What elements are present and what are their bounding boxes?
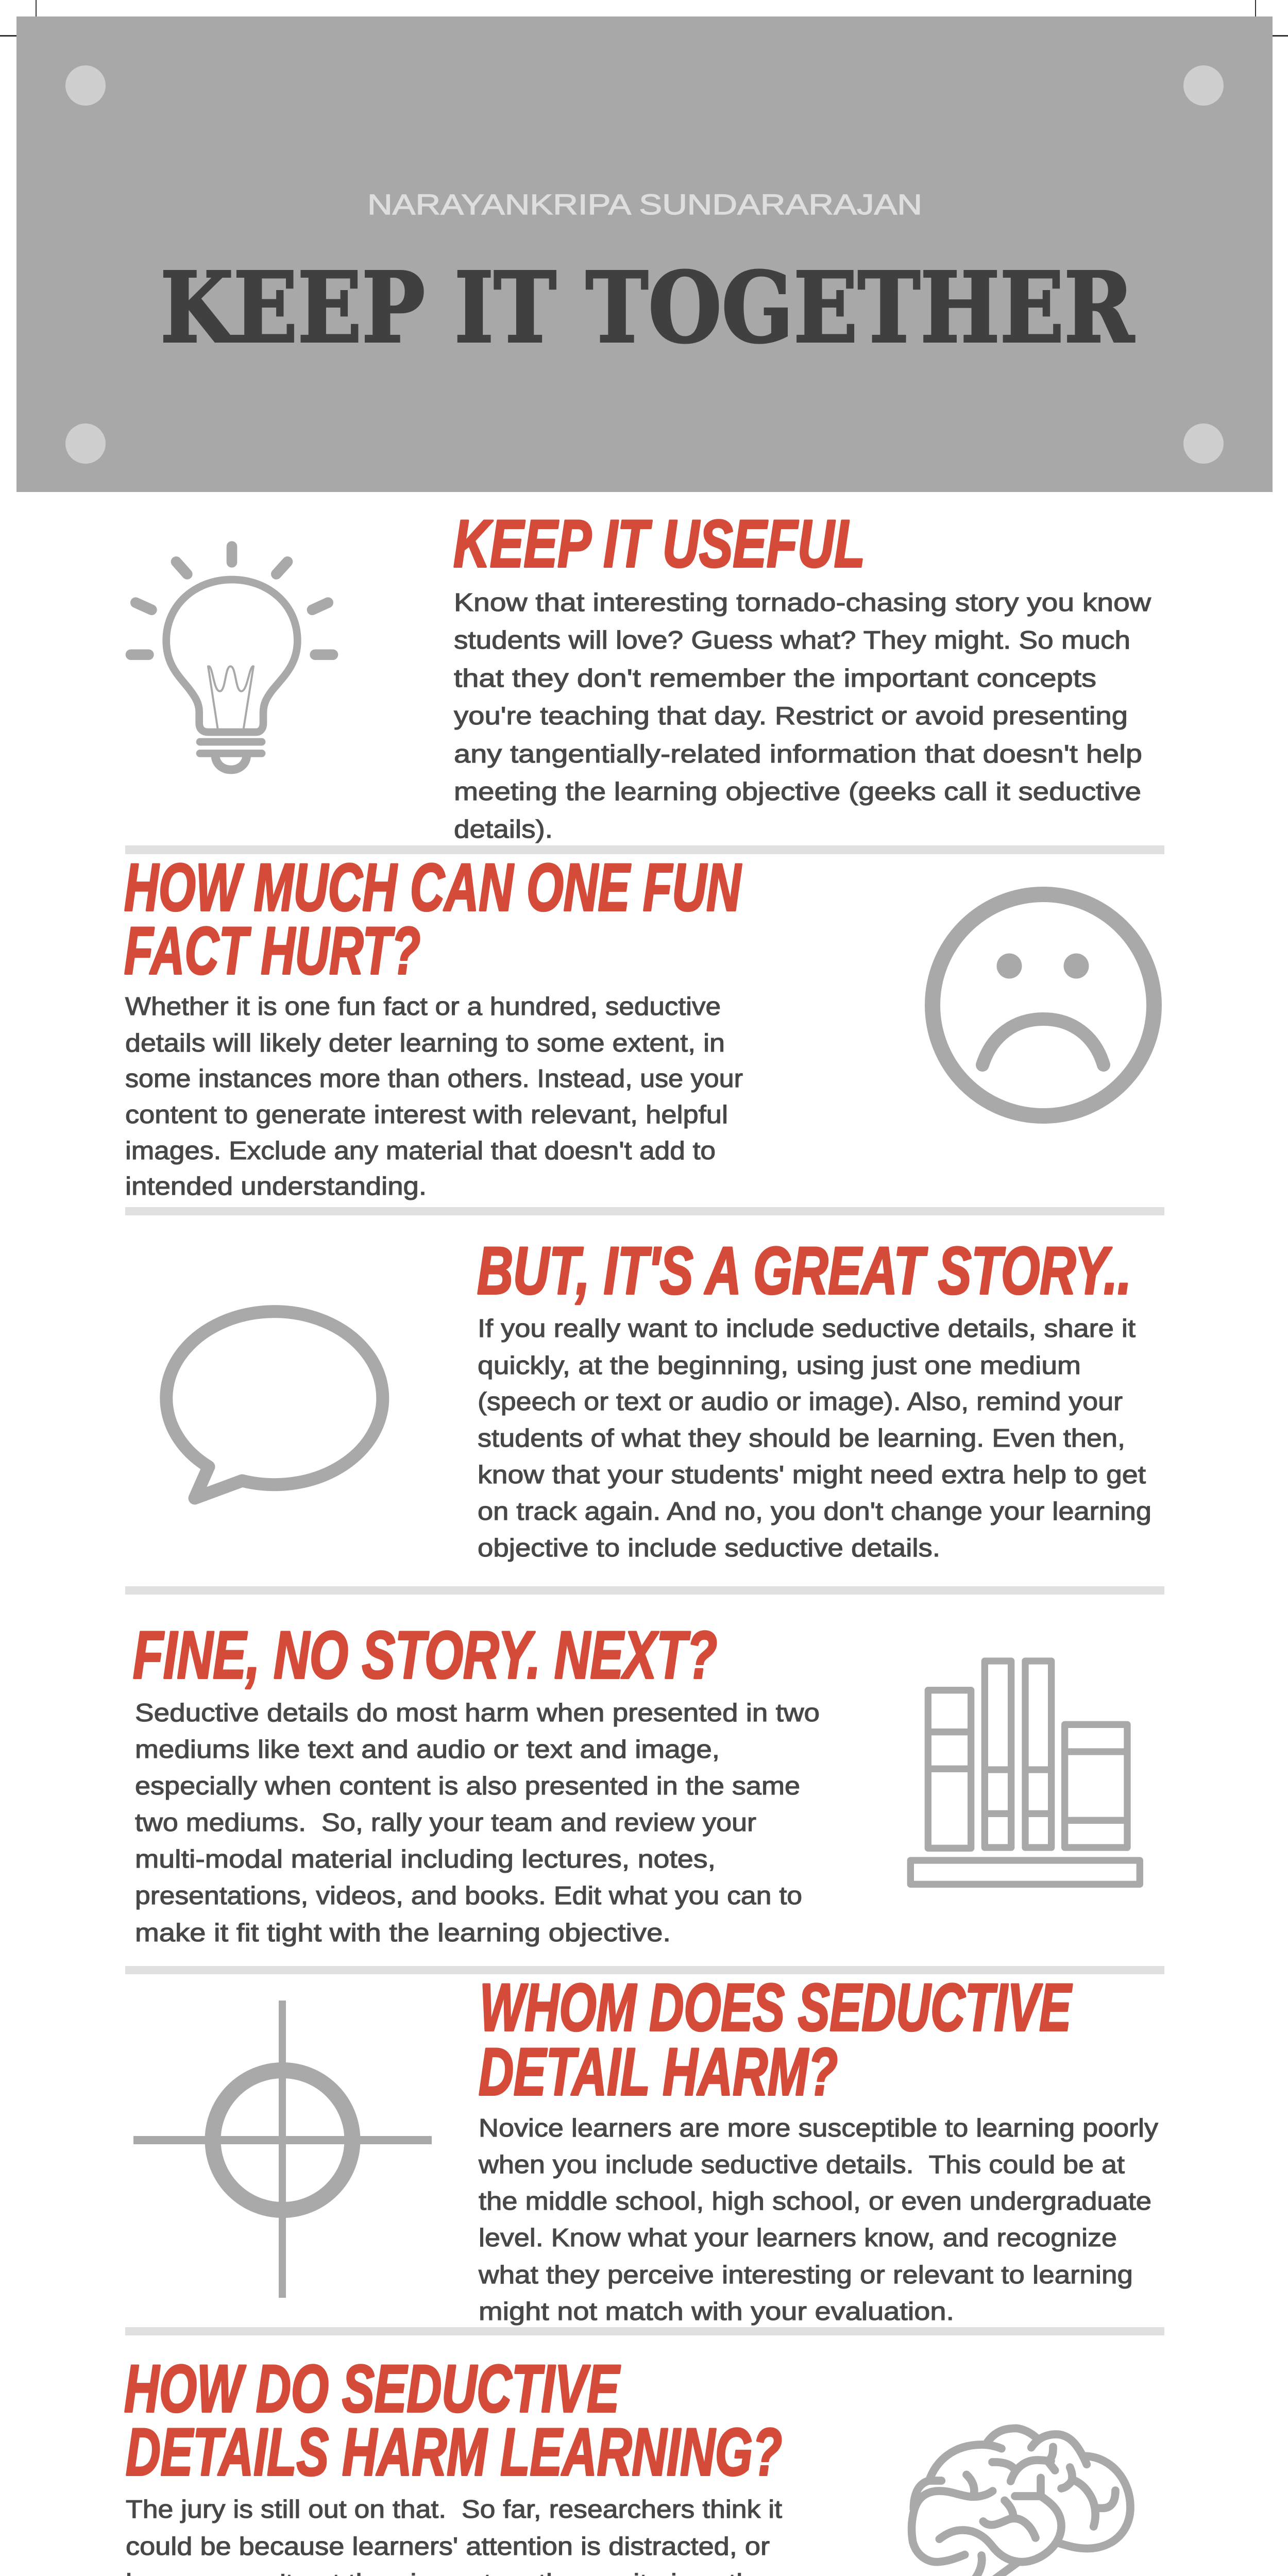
text block: fine, no story: presentations, videos, and books. Edit what you can to [135,1882,802,1910]
heading: how much can one fun fact hurt: FACT HURT? [124,913,420,988]
text block: keep it useful: any tangentially-related information that doesn't help [454,740,1142,768]
text block: keep it useful [454,589,1151,843]
text block: fine, no story: mediums like text and audio or text and image, [135,1736,720,1764]
text block: but it's a great story: know that your students' might need extra help to get [478,1461,1146,1489]
heading: whom does seductive detail harm [479,1970,1072,2109]
text block: how much can one fun fact hurt [125,993,743,1200]
text block: how much can one fun fact hurt: intended understanding. [125,1173,427,1200]
panel: keep it useful [131,506,1151,843]
text block: whom does seductive detail harm: what they perceive interesting or relevant to learning [478,2261,1133,2289]
text block: how do seductive details harm learning: The jury is still out on that. So far, researchers think it [126,2496,782,2523]
heading: how much can one fun fact hurt: HOW MUCH CAN ONE FUN [124,850,742,925]
text block: fine, no story: make it fit tight with the learning objective. [135,1919,671,1947]
text block: keep it useful: meeting the learning objective (geeks call it seductive [454,778,1141,806]
text block: but it's a great story: quickly, at the beginning, using just one medium [478,1352,1081,1380]
panel: fine, no story [133,1617,1140,1947]
heading: how do seductive details harm learning: DETAILS HARM LEARNING? [126,2414,782,2489]
title: KEEP IT TOGETHER [160,251,1135,365]
text block: keep it useful: Know that interesting tornado-chasing story you know [454,589,1151,617]
panel: whom does seductive detail harm [133,1970,1159,2326]
text block: fine, no story: especially when content is also presented in the same [135,1772,800,1800]
text block: but it's a great story: students of what they should be learning. Even then, [478,1425,1125,1452]
text block: whom does seductive detail harm: might not match with your evaluation. [479,2298,954,2326]
heading: whom does seductive detail harm: DETAIL HARM? [479,2034,838,2109]
icon: crosshair target [133,2001,432,2298]
text block: how much can one fun fact hurt: content to generate interest with relevant, helpful [125,1101,728,1129]
text block: fine, no story: Seductive details do most harm when presented in two [135,1699,820,1727]
text block: but it's a great story [478,1315,1151,1562]
text block: whom does seductive detail harm: the middle school, high school, or even undergraduate [479,2188,1151,2215]
text block: keep it useful: that they don't remember the important concepts [454,665,1096,692]
text block: how much can one fun fact hurt: some instances more than others. Instead, use your [125,1065,743,1093]
text block: how much can one fun fact hurt: Whether it is one fun fact or a hundred, seductive [125,993,721,1021]
text block: fine, no story [135,1699,820,1947]
heading: keep it useful: KEEP IT USEFUL [453,506,865,581]
heading: how do seductive details harm learning [124,2351,782,2489]
panel: how much can one fun fact hurt [124,850,1154,1200]
panel: but it's a great story [166,1233,1151,1562]
text block: but it's a great story: objective to include seductive details. [478,1534,940,1562]
text block: but it's a great story: If you really want to include seductive details, share it [478,1315,1136,1343]
heading: how much can one fun fact hurt [124,850,742,988]
text block: fine, no story: two mediums. So, rally your team and review your [135,1809,756,1837]
icon: light bulb [131,547,333,770]
text block: whom does seductive detail harm [478,2114,1159,2326]
heading: how do seductive details harm learning: HOW DO SEDUCTIVE [124,2351,620,2426]
icon: books on shelf [910,1661,1140,1884]
text block: how much can one fun fact hurt: images. Exclude any material that doesn't add to [125,1137,716,1165]
icon: brain [911,2428,1130,2576]
author name: NARAYANKRIPA SUNDARARAJAN [367,188,922,221]
text block: keep it useful: you're teaching that day. Restrict or avoid presenting [454,702,1128,730]
text block: keep it useful: students will love? Guess what? They might. So much [454,626,1130,654]
text block: whom does seductive detail harm: level. Know what your learners know, and recognize [479,2224,1117,2252]
heading: whom does seductive detail harm: WHOM DOES SEDUCTIVE [480,1970,1072,2045]
header panel [16,16,1273,492]
icon: speech bubble [166,1312,383,1498]
text block: how much can one fun fact hurt: details will likely deter learning to some extent, in [125,1029,725,1057]
icon: sad face [933,894,1154,1116]
text block: but it's a great story: (speech or text or audio or image). Also, remind your [478,1388,1123,1416]
text block: whom does seductive detail harm: when you include seductive details. This could be at [478,2151,1125,2179]
heading: fine, no story: FINE, NO STORY. NEXT? [133,1617,717,1692]
text block: how do seductive details harm learning: could be because learners' attention is distracted, or [126,2533,770,2561]
text block: keep it useful: details). [454,816,553,843]
text block: whom does seductive detail harm: Novice learners are more susceptible to learning poorly [479,2114,1159,2142]
header corner dots [65,65,1224,464]
panel: how do seductive details harm learning [124,2351,1130,2576]
text block: how do seductive details harm learning [126,2496,808,2576]
text block: but it's a great story: on track again. And no, you don't change your learning [478,1498,1151,1526]
text block: fine, no story: multi-modal material including lectures, notes, [135,1845,716,1873]
